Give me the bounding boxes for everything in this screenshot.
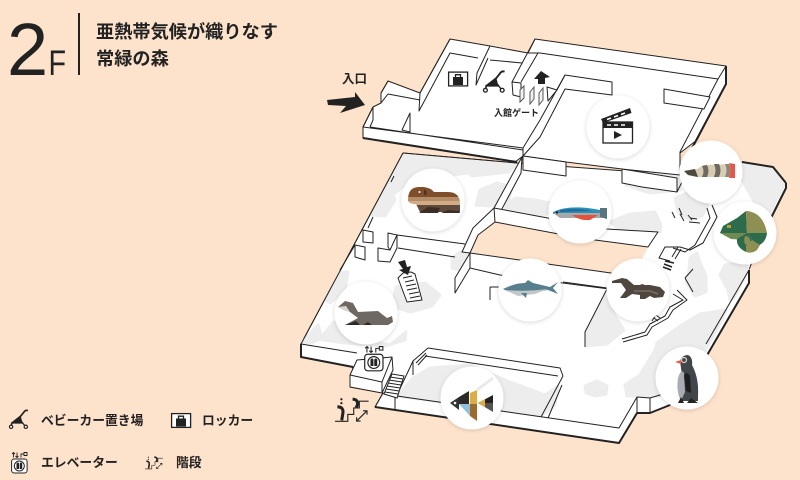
digit: 2 [7,8,48,91]
entrance lower edge [363,66,726,162]
central void [470,222,648,276]
entrance walls [363,39,726,176]
divider [78,13,80,75]
title: 亜熱帯気候が織りなす [96,21,278,42]
planting areas [302,155,785,416]
walls left of void [455,157,658,293]
label: entrance: 入口 [342,72,367,86]
floor plan: entrance level [363,39,726,176]
marker: penguin [656,346,718,410]
floor number [7,8,66,91]
letter: F [48,43,66,83]
outer lower edge [301,162,786,443]
legend: stairs label: 階段 [176,455,202,470]
marker: blue fish [548,180,612,244]
spiral path walls [622,205,717,342]
legend: stairs icon [145,457,163,469]
title: 常緑の森 [96,49,169,69]
steps on path [652,208,692,321]
marker: capybara [402,168,464,232]
right room walls [490,282,607,347]
icon: stroller [483,71,505,92]
icon: elevator on plan [365,347,383,371]
marker: newt [606,258,670,322]
marker: loach [680,140,742,204]
icon: stairs on plan [335,398,369,421]
legend [9,410,253,473]
marker: otter [334,282,398,344]
legend: locker icon [172,414,191,427]
title [96,21,278,69]
legend: locker label: ロッカー [202,413,253,428]
marker: chameleon [714,202,776,264]
escalator [398,272,422,302]
arrow: escalator direction [398,260,411,275]
marker: angelfish [440,366,504,430]
stairs [384,374,404,398]
upper right small walls [622,169,677,192]
label: gate: 入館ゲート [494,107,539,118]
icon: locker [449,72,468,86]
left rooms [340,176,465,270]
admission gates [520,86,543,105]
entrance slab [363,39,726,175]
arrow: gate direction [534,71,550,84]
pool [395,348,670,428]
top and left edge [301,153,749,353]
floor slab [301,153,786,443]
elevator block [350,357,395,407]
clapper board [603,122,632,143]
legend: elevator label: エレベーター [41,455,118,470]
legend: stroller label: ベビーカー置き場 [41,413,144,428]
legend: elevator icon [12,452,27,473]
marker: theater [586,96,650,158]
arrow: entrance [327,92,365,113]
floor plan: main floor [301,153,786,443]
legend: stroller icon [9,410,28,428]
marker: shark [498,258,562,322]
